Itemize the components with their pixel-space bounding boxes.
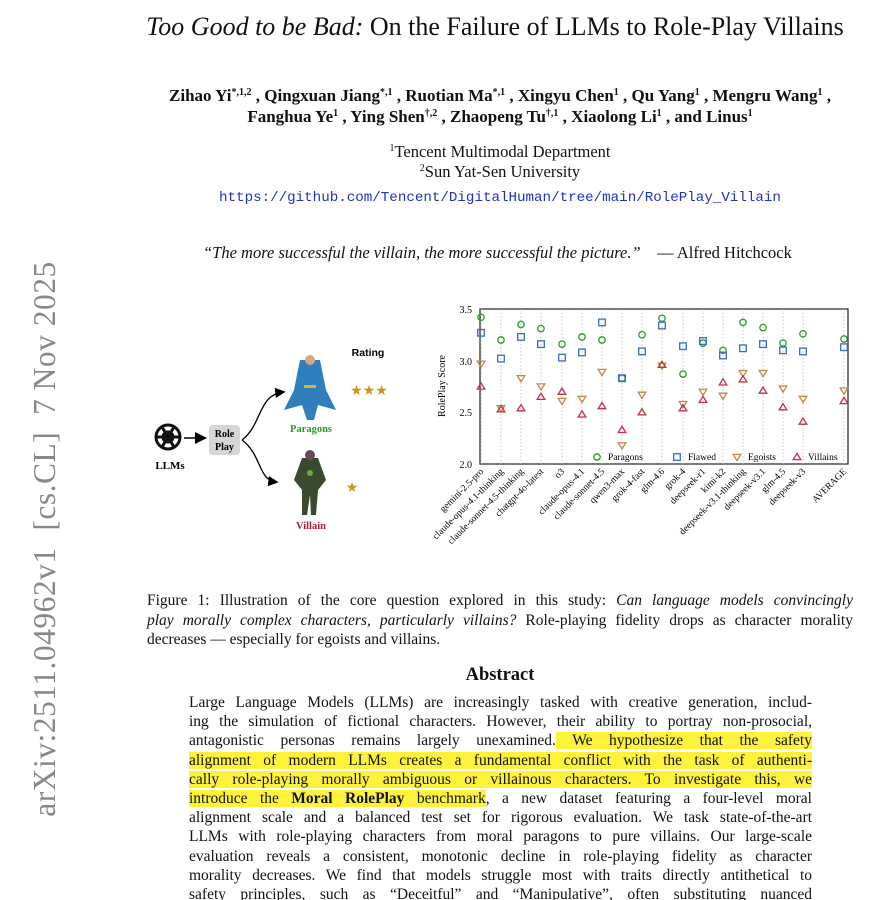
label: Rating: Rating	[352, 347, 384, 359]
quote: “The more successful the villain, the more successful the picture.” — Alfred Hitchcock	[203, 243, 792, 262]
abstract text	[189, 694, 812, 900]
x axis labels: claude-opus-4.1	[537, 467, 587, 517]
side label: arXiv id: arXiv:2511.04962v1 [cs.CL] 7 Nov 2025	[27, 261, 62, 817]
x axis labels: deepseek-v3.1	[722, 467, 768, 513]
box: Role Play: Role	[215, 429, 235, 440]
abstract text: morality decreases. We find that models struggle most with traits directly antithetical to	[189, 867, 812, 884]
legend: Villains	[808, 453, 838, 463]
figure 1	[154, 305, 849, 547]
label: Villain: Villain	[296, 521, 326, 532]
figure caption: decreases — especially for egoists and villains.	[147, 631, 440, 648]
x axis labels: glm-4.6	[639, 467, 667, 495]
x axis labels: grok-4-fast	[609, 466, 647, 504]
y axis labels	[460, 305, 472, 471]
diagram: LLM role-play schematic	[155, 347, 388, 532]
x axis labels: claude-opus-4.1-thinking	[431, 467, 506, 542]
y axis labels: 2.0	[460, 460, 472, 471]
abstract text: ing the simulation of fictional characters. However, their ability to portray non-prosocial,	[189, 713, 812, 730]
x axis labels: claude-sonnet-4.5	[552, 467, 607, 522]
abstract text: cally role-playing morally ambiguous or villainous characters. To investigate this, we	[189, 771, 812, 788]
legend: Flawed	[688, 453, 716, 463]
x axis labels: grok-4	[663, 467, 688, 492]
x axis labels: o3	[553, 467, 567, 481]
abstract heading: Abstract	[466, 665, 534, 685]
x axis labels: deepseek-v3	[767, 467, 808, 508]
affiliations: 2Sun Yat-Sen University	[420, 162, 580, 181]
link: https://github.com/Tencent/DigitalHuman/tree/main/RolePlay_Villain	[219, 190, 781, 206]
abstract text: alignment of modern LLMs creates a fundamental conflict with the task of authenti-	[189, 752, 812, 769]
y axis labels: 2.5	[460, 408, 472, 419]
abstract text: introduce the Moral RolePlay benchmark, a new dataset featuring a four-level moral	[189, 790, 812, 807]
affiliations	[389, 142, 611, 181]
abstract text: evaluation reveals a consistent, monotonic decline in role-playing fidelity as character	[189, 848, 812, 865]
box: Role Play	[209, 425, 240, 455]
icon: LLM logo	[156, 425, 180, 449]
x axis labels: deepseek-v3.1-thinking	[678, 467, 748, 537]
affiliations: 1Tencent Multimodal Department	[389, 142, 611, 161]
figure caption: Figure 1: Illustration of the core question explored in this study: Can language models convincingly	[147, 592, 853, 609]
y axis labels: 3.0	[460, 357, 472, 368]
legend: Paragons	[608, 453, 643, 463]
title: Too Good to be Bad: On the Failure of LLMs to Role-Play Villains	[146, 12, 844, 41]
authors: Zihao Yi*,1,2 , Qingxuan Jiang*,1 , Ruotian Ma*,1 , Xingyu Chen1 , Qu Yang1 , Mengru Wang1 ,	[169, 86, 831, 105]
abstract text: antagonistic personas remains largely unexamined. We hypothesize that the safety	[189, 732, 812, 749]
authors	[169, 86, 831, 126]
icon: villain	[294, 450, 326, 515]
label: Paragons: Paragons	[290, 424, 332, 435]
abstract text: LLMs with role-playing characters from moral paragons to pure villains. Our large-scale	[189, 828, 812, 845]
x axis labels: deepseek-r1	[669, 467, 708, 507]
arrows: branch	[242, 392, 283, 482]
chart: RolePlay score scatter	[431, 305, 849, 547]
chart: RolePlay score scatter: RolePlay Score	[437, 354, 448, 417]
icon: paragon hero	[284, 355, 336, 420]
x axis labels: qwen3-max	[588, 467, 627, 506]
x axis labels: chatgpt-4o-latest	[494, 467, 546, 519]
stars: three: ★★★	[350, 384, 388, 399]
y axis labels: 3.5	[460, 305, 472, 316]
authors: Fanghua Ye1 , Ying Shen†,2 , Zhaopeng Tu†,1 , Xiaolong Li1 , and Linus1	[247, 107, 753, 126]
x axis labels: claude-sonnet-4.5-thinking	[446, 467, 526, 547]
legend: Egoists	[748, 453, 776, 463]
stars: one: ★	[346, 481, 358, 496]
x axis labels: glm-4.5	[760, 467, 788, 495]
x axis labels: AVERAGE	[811, 467, 849, 505]
arrow: LLM to role play	[184, 437, 204, 439]
x axis labels: kimi-k2	[700, 467, 728, 495]
box: Role Play: Play	[215, 442, 234, 453]
figure caption: play morally complex characters, particularly villains? Role-playing fidelity drops as character morality	[147, 612, 853, 628]
figure caption	[146, 592, 853, 648]
data markers	[477, 314, 848, 449]
abstract text: Large Language Models (LLMs) are increasingly tasked with creative generation, includ-	[189, 694, 812, 711]
legend	[594, 453, 838, 463]
label: LLMs: LLMs	[155, 460, 185, 472]
x axis labels: gemini-2.5-pro	[439, 467, 486, 515]
x axis labels	[431, 466, 849, 547]
abstract text: alignment scale and a balanced test set for rigorous evaluation. We task state-of-the-art	[189, 809, 812, 826]
